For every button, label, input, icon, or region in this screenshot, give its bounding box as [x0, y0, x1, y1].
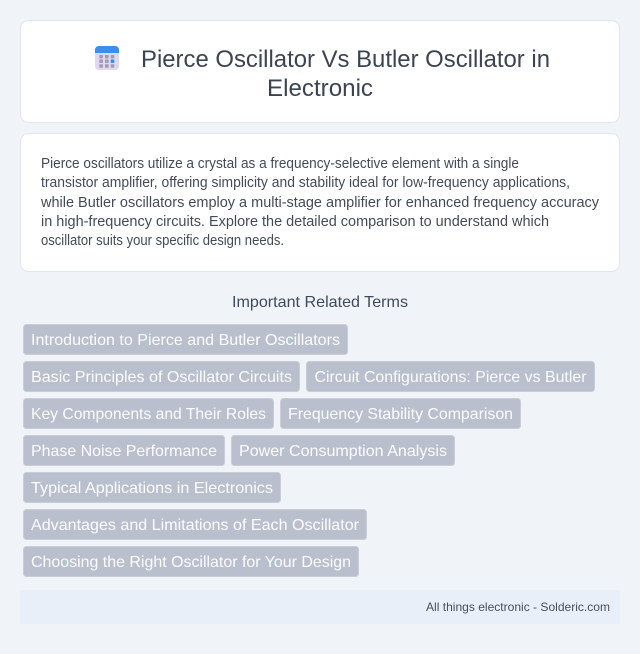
- tag: advantages and limitations: [24, 510, 366, 540]
- text block: summary paragraph: [40, 156, 600, 249]
- tag: circuit configurations: [306, 362, 594, 392]
- tag: key components: [24, 398, 274, 428]
- tag: key components: Key Components and Their Roles: [31, 406, 266, 423]
- tag: power consumption: Power Consumption Analysis: [239, 443, 447, 460]
- tag: frequency stability: [280, 398, 520, 428]
- title: Pierce Oscillator Vs Butler Oscillator in: [141, 46, 550, 73]
- text block: summary paragraph: oscillator suits your specific design needs.: [41, 233, 284, 249]
- tag: power consumption: [232, 436, 454, 466]
- title: Electronic: [267, 75, 373, 102]
- panel: summary: [20, 134, 620, 272]
- footer: [20, 590, 620, 624]
- tag: typical applications: Typical Applications in Electronics: [31, 480, 273, 497]
- tag: choosing the right oscillator: Choosing the Right Oscillator for Your Design: [31, 554, 351, 571]
- text block: summary paragraph: transistor amplifier, offering simplicity and stability ideal for low-frequency applications,: [41, 175, 570, 191]
- text block: summary paragraph: Pierce oscillators utilize a crystal as a frequency-selective element with a single: [41, 156, 519, 172]
- title: [141, 46, 550, 102]
- tag: choosing the right oscillator: [24, 546, 358, 576]
- tag: phase noise: Phase Noise Performance: [31, 443, 217, 460]
- tag: frequency stability: Frequency Stability Comparison: [288, 406, 513, 423]
- heading: important related terms: Important Related Terms: [232, 294, 408, 311]
- tag: phase noise: [24, 436, 224, 466]
- text block: summary paragraph: while Butler oscillators employ a multi-stage amplifier for enhanced frequency accuracy: [40, 195, 600, 211]
- icon: calendar grid: [95, 46, 119, 70]
- text block: summary paragraph: in high-frequency circuits. Explore the detailed comparison to understand which: [41, 214, 549, 230]
- tag: introduction: Introduction to Pierce and Butler Oscillators: [31, 332, 340, 349]
- tag: introduction: [24, 324, 348, 354]
- tag: circuit configurations: Circuit Configurations: Pierce vs Butler: [314, 369, 587, 386]
- tag: basic principles: [24, 362, 300, 392]
- tag: advantages and limitations: Advantages and Limitations of Each Oscillator: [31, 517, 360, 534]
- panel: header: [20, 20, 620, 122]
- tag: typical applications: [24, 472, 280, 502]
- tag: basic principles: Basic Principles of Oscillator Circuits: [31, 369, 292, 386]
- footer: All things electronic - Solderic.com: [426, 600, 610, 614]
- tag list: [24, 324, 594, 576]
